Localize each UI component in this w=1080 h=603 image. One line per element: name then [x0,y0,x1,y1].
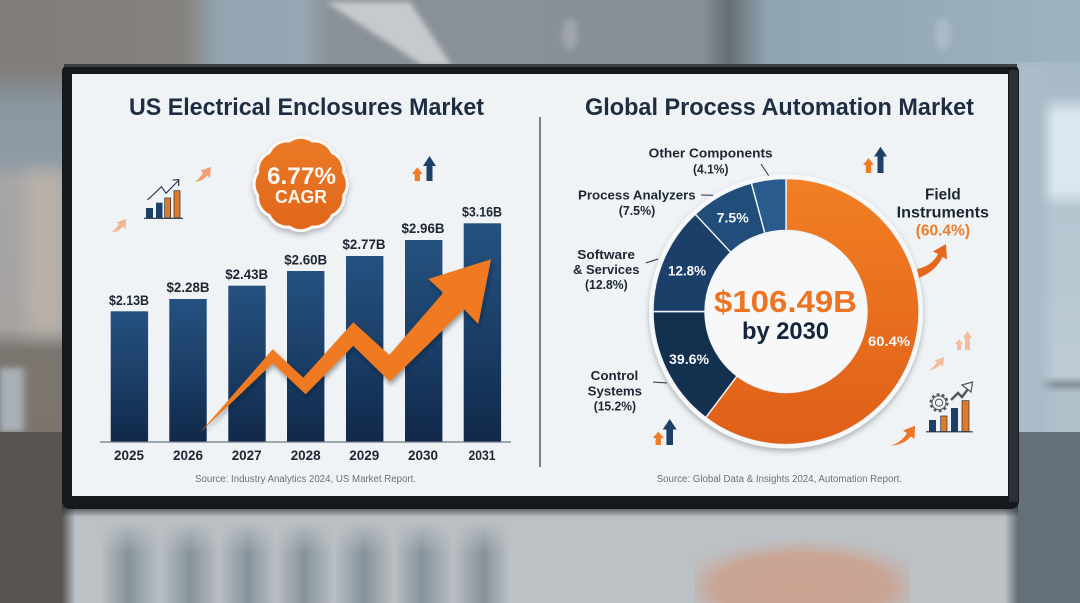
segment: software and services [653,214,731,312]
year axis labels: 2031 [468,447,496,463]
label: other components: (4.1%) [693,161,728,176]
label: field instruments: Field [925,186,961,203]
icon: up arrows left panel [412,156,436,181]
segment percentages: 60.4% [868,334,910,349]
label: control systems [588,368,667,414]
year axis labels: 2028 [291,447,321,463]
label: field instruments: (60.4%) [916,223,970,240]
year axis labels: 2030 [408,447,438,463]
year axis labels: 2025 [114,447,144,463]
icon: gear with bar chart [926,382,973,432]
arrow: field instruments callout [917,244,947,278]
monitor bezel [62,64,1019,509]
icon: small bar chart with rising line [144,180,183,218]
panel: global process automation market [573,94,989,485]
bar value labels: $2.13B [109,293,149,308]
icon: peach up arrows right [955,331,972,350]
screen panel [72,74,1008,496]
label: software and services: Software [577,247,635,262]
centre total: by 2030 [742,318,829,345]
label: software and services: (12.8%) [585,277,628,292]
donut chart [649,174,923,448]
label: control systems: Control [591,368,638,383]
icon: peach swoosh arrow lower [111,219,126,233]
bars [111,223,501,442]
label: process analyzers: Process Analyzers [578,187,696,202]
bar value labels: $2.60B [284,253,327,268]
segment percentages [668,211,910,367]
CAGR badge: 6.77% [267,163,336,190]
segment percentages: 7.5% [717,211,749,226]
label: control systems: (15.2%) [594,399,636,414]
icon: peach swoosh arrow upper [195,167,211,182]
bar value labels: $3.16B [462,205,502,220]
year axis labels: 2029 [349,447,379,463]
source note left: Source: Industry Analytics 2024, US Market Report. [195,474,416,485]
divider [539,117,541,467]
label: field instruments [897,186,989,240]
label: other components: Other Components [649,145,773,160]
table surface with screen reflection [0,432,1080,603]
heading: US Electrical Enclosures Market: US Electrical Enclosures Market [129,94,484,121]
heading: Global Process Automation Market: Global Process Automation Market [585,94,974,121]
icon: peach swoosh arrow right [929,357,944,370]
centre total: $106.49B [714,284,857,319]
label: process analyzers [578,187,713,218]
bar value labels: $2.28B [166,280,210,295]
icon: up arrows top right [863,147,887,173]
panel: US electrical enclosures market [100,94,511,485]
year axis labels: 2026 [173,447,203,463]
blurred office background [0,0,1080,432]
label: field instruments: Instruments [897,204,989,221]
segment: other components [751,178,786,233]
year axis labels: 2027 [232,447,262,463]
label: process analyzers: (7.5%) [619,203,655,218]
bar chart [100,205,511,463]
centre total [714,284,857,345]
CAGR badge [254,137,347,231]
icon: orange swoosh arrow right [891,426,915,446]
bar value labels [109,205,502,308]
bar value labels: $2.96B [402,221,445,236]
segment: process analyzers [695,183,765,252]
segment: control systems [653,312,737,418]
bar value labels: $2.43B [225,267,268,282]
label: control systems: Systems [588,383,642,398]
segment: field instruments [706,178,919,444]
bar value labels: $2.77B [342,237,386,252]
label: other components [649,145,773,176]
segment percentages: 39.6% [669,352,709,367]
label: software and services [573,247,658,292]
arrow: orange growth arrow [200,259,491,433]
icon: up arrows lower left [653,419,677,445]
source note right: Source: Global Data & Insights 2024, Automation Report. [657,474,902,485]
label: software and services: & Services [573,262,640,277]
CAGR badge: CAGR [275,187,327,207]
year axis labels [114,447,496,463]
segment percentages: 12.8% [668,264,706,279]
